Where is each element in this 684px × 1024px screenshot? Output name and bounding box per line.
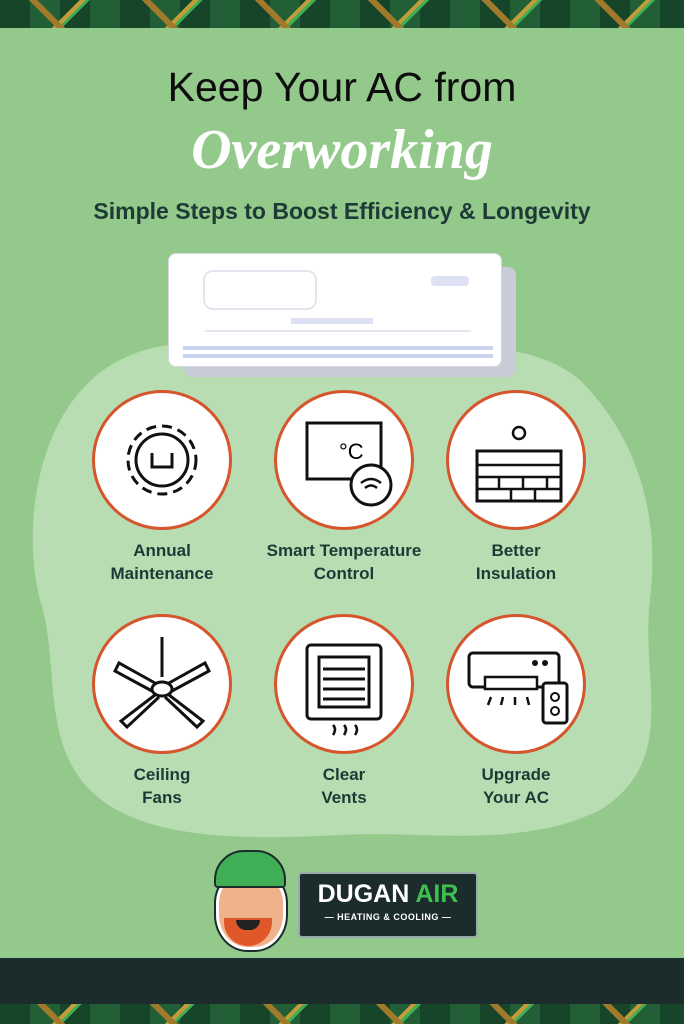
icon: AC unit xyxy=(168,253,516,377)
item: Smart Temperature Control xyxy=(267,390,421,583)
bottom plaid band xyxy=(0,1004,684,1024)
script word: Overworking xyxy=(191,119,493,181)
item: Upgrade Your AC: Upgrade xyxy=(482,765,550,784)
item: Smart Temperature Control: Smart Temperature xyxy=(267,541,421,560)
item: Upgrade Your AC: Your AC xyxy=(483,788,549,807)
item: Smart Temperature Control: °C xyxy=(339,439,364,464)
item: Annual Maintenance: Annual xyxy=(133,541,191,560)
subtitle: Simple Steps to Boost Efficiency & Longevity xyxy=(93,198,591,224)
item: Annual Maintenance xyxy=(92,390,232,583)
logo: DUGAN AIR xyxy=(318,880,458,908)
footer dark band xyxy=(0,958,684,1004)
item: Smart Temperature Control: Control xyxy=(314,564,374,583)
item: Better Insulation xyxy=(446,390,586,583)
item: Ceiling Fans: Ceiling xyxy=(134,765,190,784)
item: Ceiling Fans: Fans xyxy=(142,788,182,807)
item: Clear Vents: Vents xyxy=(321,788,367,807)
mascot xyxy=(214,850,288,952)
title: Keep Your AC from xyxy=(168,64,516,110)
logo xyxy=(298,872,478,938)
item: Better Insulation: Better xyxy=(491,541,541,560)
item: Clear Vents xyxy=(274,614,414,807)
item: Ceiling Fans xyxy=(92,614,232,807)
item: Better Insulation: Insulation xyxy=(476,564,556,583)
top plaid band xyxy=(0,0,684,28)
item: Clear Vents: Clear xyxy=(323,765,365,784)
item: Upgrade Your AC xyxy=(446,614,586,807)
logo: — HEATING & COOLING — xyxy=(325,912,451,922)
item: Annual Maintenance: Maintenance xyxy=(110,564,213,583)
